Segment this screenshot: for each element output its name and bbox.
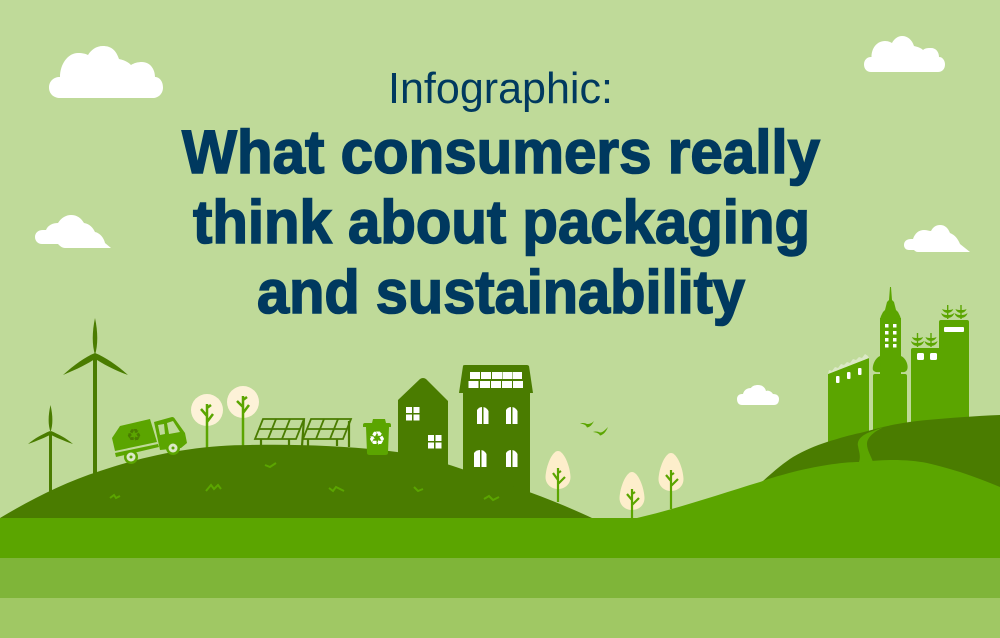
back hill right: [763, 415, 1000, 500]
tree: roadside centre: [620, 472, 644, 519]
building with crenellated roof: [828, 354, 869, 450]
recycling bin: ♻: [368, 428, 386, 450]
cloud: middle left: [35, 215, 111, 248]
truck cab windows: [158, 421, 180, 435]
title: [182, 118, 820, 326]
wind turbine large: [63, 318, 128, 475]
building with rooftop gardens: [911, 305, 969, 425]
rooftop plant 2: [924, 333, 938, 347]
solar panel left: [255, 419, 304, 446]
ground band medium: [0, 558, 1000, 598]
cloud: middle right: [904, 225, 970, 252]
solar panel right: [303, 419, 351, 447]
truck cab: [154, 417, 187, 450]
front hill right: [637, 460, 1000, 520]
round tree left: [191, 394, 223, 454]
apartment arched windows: [474, 407, 518, 467]
left hill: [0, 445, 592, 518]
tree: roadside left: [546, 451, 570, 502]
round tree right: [227, 386, 259, 446]
recycling bin: [363, 419, 391, 455]
house windows: [406, 407, 442, 448]
truck chassis: [115, 444, 159, 457]
wind turbine small: [28, 405, 73, 492]
buildings: city skyline: [828, 287, 969, 450]
grass tufts: [110, 463, 499, 500]
ground band dark: [0, 518, 1000, 558]
title line 1: What consumers really: [182, 118, 820, 186]
house with pitched roof: [398, 378, 448, 470]
truck recycling symbol: ♻: [126, 426, 142, 446]
subtitle: Infographic:: [388, 64, 613, 113]
cloud: small near city: [737, 385, 779, 405]
title line 3: and sustainability: [257, 258, 745, 326]
truck cargo box: [112, 419, 157, 451]
winding path: [858, 427, 884, 462]
apartment building: [459, 365, 533, 495]
cloud: top right: [864, 36, 945, 72]
rooftop plant 1: [911, 333, 924, 347]
cloud: top left: [49, 46, 163, 98]
garbage truck: [112, 417, 187, 464]
title line 2: think about packaging: [193, 188, 810, 256]
birds: [580, 421, 608, 436]
rooftop plant 4: [954, 305, 968, 319]
tree: roadside right: [658, 453, 684, 509]
central tower: [873, 287, 908, 434]
rooftop plant 3: [941, 305, 954, 319]
truck wheels: [124, 441, 180, 464]
apartment rooftop solar panels: [468, 372, 523, 388]
ground band light: [0, 598, 1000, 638]
